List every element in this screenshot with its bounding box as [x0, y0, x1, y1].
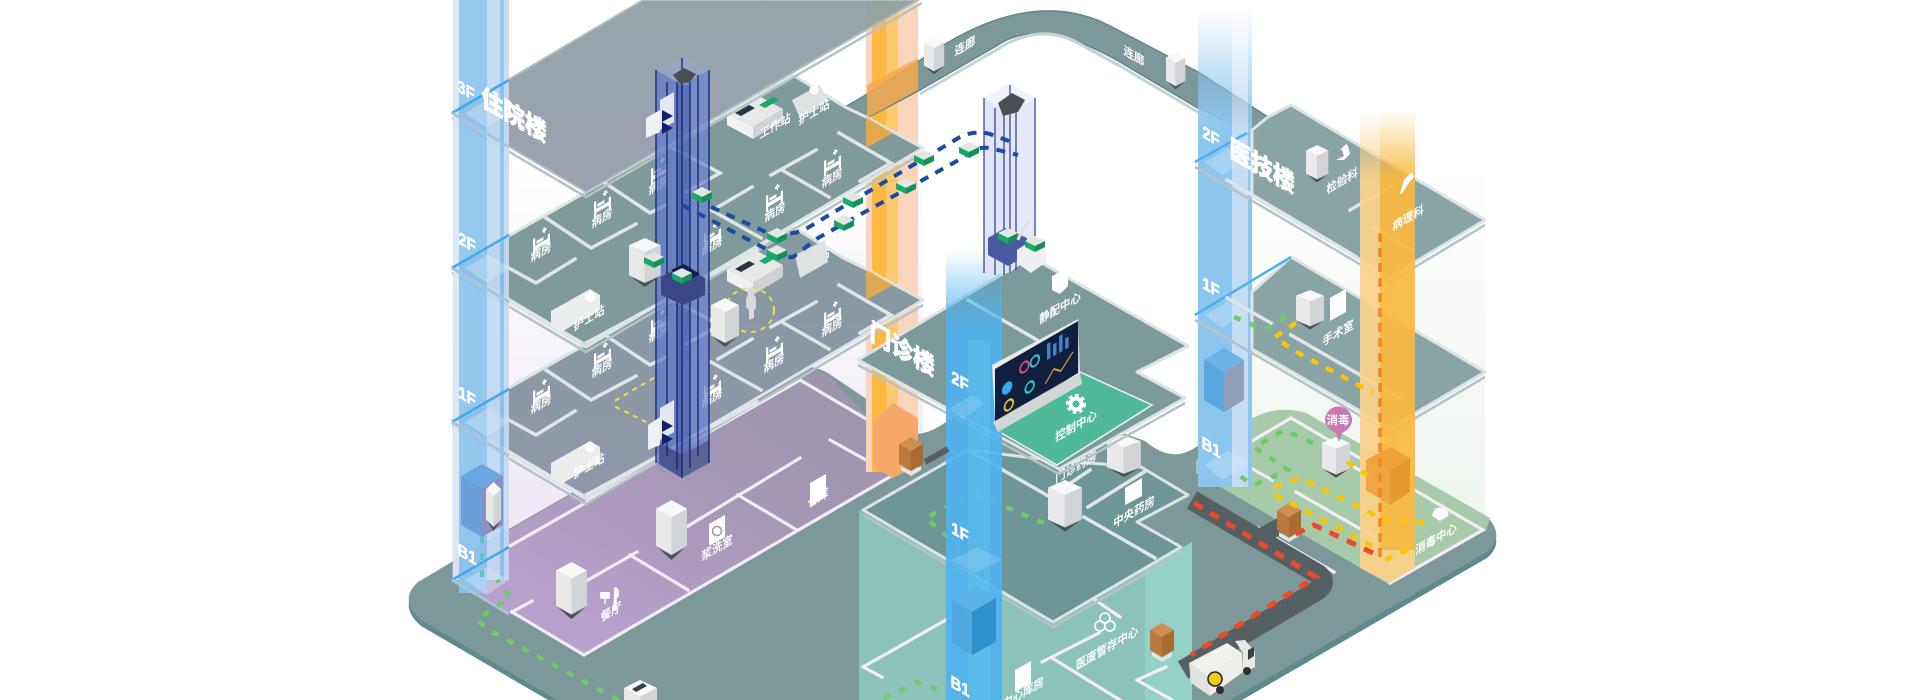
- outpatient floor labels: 1F: [951, 518, 969, 547]
- pink disinfection pin: [1325, 406, 1352, 442]
- carriage: [988, 228, 1027, 266]
- medical tech corner glass: [1205, 148, 1250, 480]
- 1F room labels: [531, 240, 842, 484]
- corridor: [845, 11, 1268, 137]
- big elevator shaft: [646, 55, 709, 478]
- warehouse icon: [810, 474, 826, 506]
- 1F room labels: 护士站: [798, 244, 830, 277]
- orange vertical dashed route: [1378, 233, 1382, 560]
- outpatient B1 labels: 医废暂存中心: [1076, 622, 1138, 673]
- outpatient floor labels: [951, 367, 969, 700]
- robots outpatient: [1048, 435, 1141, 532]
- jingpei icon: [1052, 268, 1068, 294]
- 1F room labels: 护士站: [573, 449, 605, 482]
- blue floor corner lines: [452, 80, 509, 614]
- 2F slab of inpatient building: [452, 75, 923, 352]
- green totes on bridge: [692, 142, 979, 261]
- 1F room labels: 病房: [649, 319, 669, 346]
- robot arm lower: [648, 400, 674, 450]
- label: corridor 2: 连廊: [1124, 42, 1144, 69]
- truck: [1189, 640, 1255, 696]
- floor labels inpatient: 2F: [458, 228, 476, 257]
- outpatient 1F labels: [1055, 447, 1155, 531]
- wash room icon: [709, 515, 725, 546]
- medical tech 2F slab: [1195, 105, 1485, 282]
- yellow thin dashed route: [616, 378, 654, 422]
- medical tech routes: [1233, 313, 1428, 560]
- medical tech title: 医技楼: [1230, 134, 1294, 200]
- floor labels inpatient: B1: [458, 540, 476, 569]
- B1 labels and icons: [601, 474, 828, 625]
- outpatient corner glass: [950, 395, 1002, 573]
- 1F room labels: 病房: [702, 384, 722, 411]
- medical tech blue column: [1198, 10, 1252, 487]
- 2F room labels: 病房: [822, 164, 842, 191]
- outpatient 1F labels: 门诊药房: [1055, 447, 1097, 486]
- B1 labels and icons: 浆洗室: [701, 531, 733, 564]
- floor labels inpatient: 1F: [458, 382, 476, 411]
- 2F room labels: 病房: [702, 232, 722, 259]
- outpatient 2F labels: [1039, 268, 1097, 445]
- robot arm: [1017, 222, 1046, 273]
- corridor over orange column: [867, 58, 918, 118]
- 1F room labels: 病房: [764, 349, 784, 376]
- disinfection icon: [1432, 508, 1448, 521]
- orange cabinets on road: [1150, 503, 1301, 662]
- medical tech labels: 手术室: [1322, 316, 1354, 349]
- 2F room labels: 病房: [765, 198, 785, 225]
- B1 labels and icons: 仓库: [808, 484, 828, 511]
- medical tech labels: [1322, 144, 1457, 558]
- microscope icon: [1336, 144, 1350, 160]
- floor labels medical tech: B1: [1202, 433, 1220, 462]
- inpatient B1 room walls: [482, 380, 893, 655]
- gear icon: [1068, 396, 1084, 412]
- medical tech labels: 消毒中心: [1415, 519, 1457, 558]
- elevator motor: [673, 68, 696, 84]
- control screen: [992, 319, 1082, 432]
- teal arrows inside left column: [480, 530, 484, 577]
- 2F room labels: 病房: [649, 171, 669, 198]
- road: [925, 449, 1323, 670]
- orange box elevator B1: [874, 403, 918, 478]
- outpatient B1 walls: [863, 600, 1172, 700]
- B1 labels and icons: 餐厅: [601, 598, 621, 625]
- B1 cabinet robots: [556, 500, 687, 700]
- robot beside middle elevator: [629, 238, 664, 287]
- medical tech robots: [924, 37, 1350, 478]
- outpatient 2F labels: 静配中心: [1039, 288, 1081, 327]
- outpatient 1F slab: [863, 450, 1188, 627]
- 2F room labels: 病房: [531, 238, 551, 265]
- robot arm top: [646, 92, 674, 138]
- outpatient elevator box: [952, 586, 996, 655]
- background wash: inpatient building walls: [452, 0, 1485, 655]
- workstation and nurse station top floor: [727, 85, 830, 142]
- left blue column inpatient: [453, 0, 509, 593]
- pathology icon: [1400, 172, 1414, 194]
- 2F room labels: [531, 146, 842, 334]
- robot by nurse: [711, 298, 739, 347]
- orange corner on 1F: [866, 269, 893, 300]
- outpatient blue column: [946, 250, 1002, 700]
- 3F roof slab of inpatient building: [452, 0, 922, 197]
- 1F slab of inpatient building: [452, 227, 923, 504]
- orange column: inpatient building: [866, 0, 918, 472]
- second elevator shaft: [984, 83, 1046, 275]
- nurse and yellow circle path: [726, 287, 774, 332]
- orange cabinet near inpatient: [899, 437, 923, 476]
- outpatient 1F labels: 中央药房: [1113, 492, 1155, 531]
- blue dashed bridge routes: [682, 133, 1018, 257]
- pink disinfection pin: 消毒: [1326, 413, 1350, 427]
- outpatient floor labels: 2F: [951, 367, 969, 396]
- outpatient 2F labels: 控制中心: [1055, 406, 1097, 445]
- label: corridor 1: 连廊: [955, 32, 975, 59]
- medical tech orange column: [1360, 110, 1415, 583]
- medical tech B1 elevator box: [1204, 348, 1244, 412]
- 1F room labels: 病房: [592, 354, 612, 381]
- orange corner on 2F: [866, 117, 893, 148]
- floor labels medical tech: 2F: [1202, 122, 1220, 151]
- outpatient title: 门诊楼: [870, 316, 934, 383]
- control centre floor: [996, 372, 1152, 465]
- medical tech labels: 病理科: [1392, 201, 1424, 234]
- inpatient building title: 住院楼: [482, 82, 546, 149]
- green route outpatient 1F: [926, 493, 1044, 548]
- floor labels medical tech: [1202, 122, 1220, 462]
- medical tech B1 room walls: [1228, 418, 1483, 583]
- purple B1 zone of inpatient building: [452, 368, 895, 655]
- blue elevator box B1: [461, 464, 503, 537]
- orange elevator box: [1366, 447, 1410, 505]
- workstation 2: [727, 251, 783, 295]
- floor labels inpatient: 3F: [457, 76, 475, 105]
- floor labels medical tech: 1F: [1202, 273, 1220, 302]
- outpatient 2F slab: [858, 257, 1188, 474]
- floor labels inpatient: [457, 76, 476, 569]
- biohazard icon: [1095, 613, 1115, 631]
- 2F room labels: 护士站: [573, 301, 605, 334]
- red route: [1191, 503, 1316, 655]
- surgery icon: [1330, 289, 1346, 321]
- 2F room labels: 病房: [592, 204, 612, 231]
- workstation and nurse station top floor: 护士站: [798, 95, 830, 128]
- B1 green zone of medical tech building: [1196, 410, 1490, 585]
- 1F room labels: 病房: [531, 390, 551, 417]
- medical tech 1F slab: [1195, 257, 1485, 433]
- shaft motor: [998, 93, 1025, 116]
- green route outpatient B1: [884, 682, 938, 698]
- outpatient B1 labels: [1002, 613, 1138, 700]
- green route B1 inpatient: [477, 580, 618, 700]
- outpatient light-teal wall: [859, 510, 1192, 700]
- ground plate: [409, 366, 1496, 700]
- elevator car middle: [661, 264, 705, 305]
- 1F room labels: 病房: [822, 313, 842, 340]
- medical tech labels: 检验科: [1326, 164, 1358, 197]
- bottom robot truncated by frame: [624, 680, 657, 700]
- workstation and nurse station top floor: 工作站: [759, 109, 791, 142]
- restaurant icon: [601, 588, 618, 610]
